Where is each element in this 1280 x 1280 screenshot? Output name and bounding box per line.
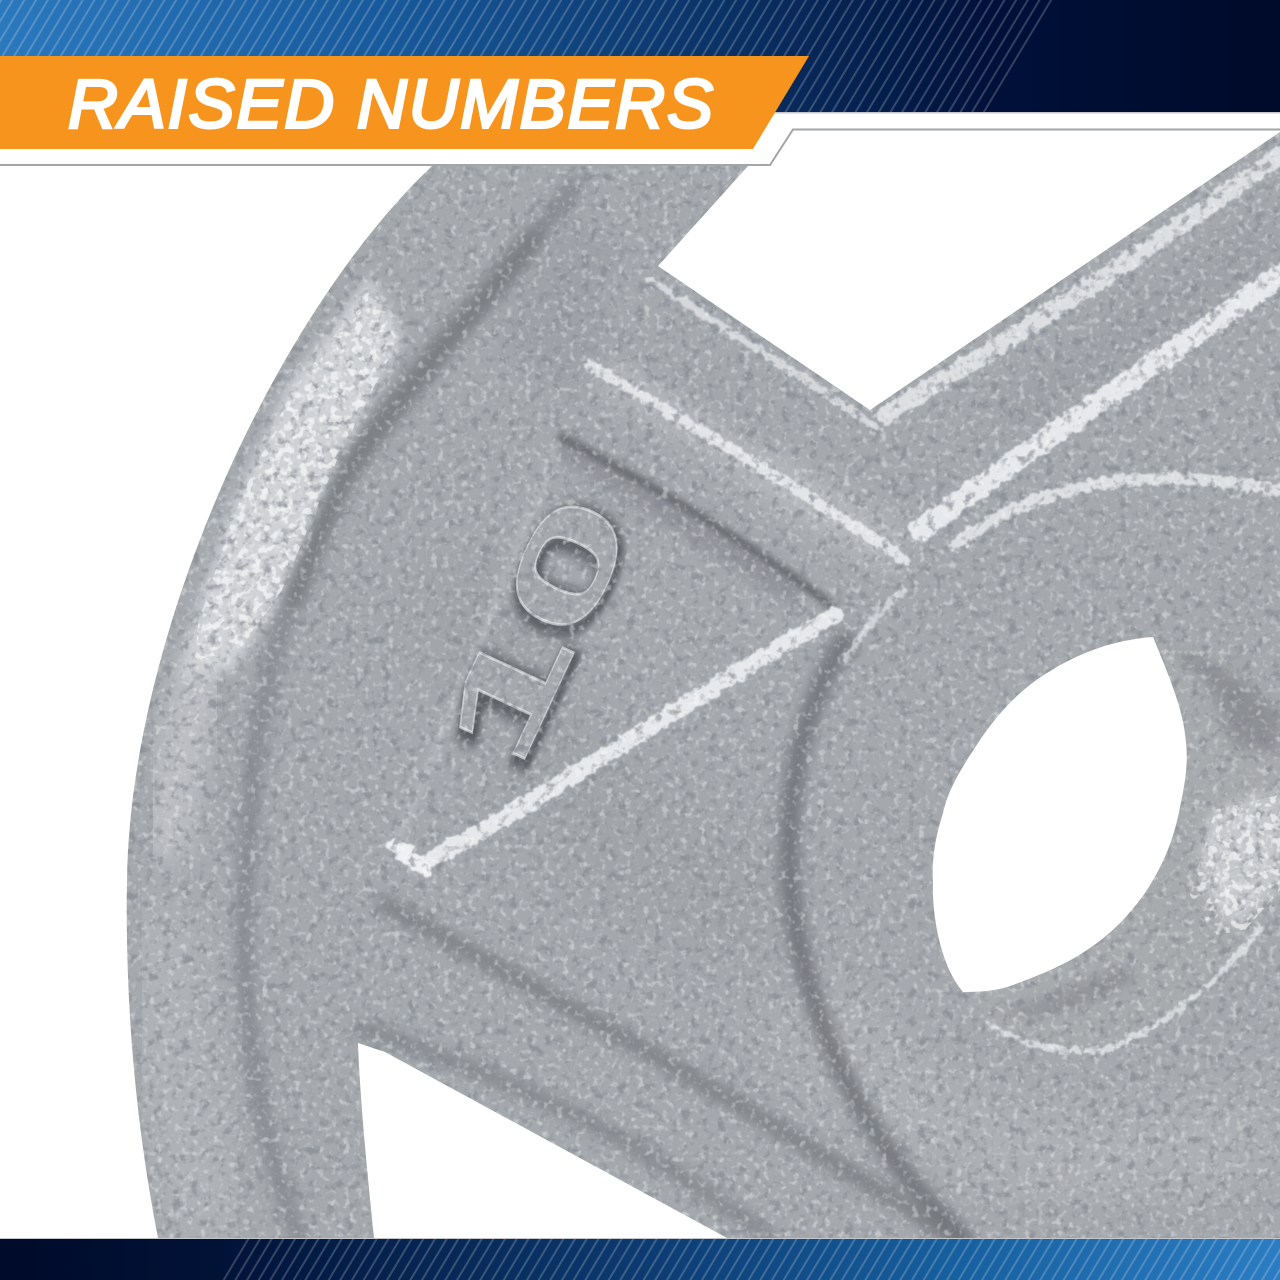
orange title banner (0, 56, 809, 149)
hole wall sparkle (1190, 796, 1280, 935)
photo: cast iron weight plate (100, 130, 1280, 1240)
bottom gradient band (0, 1238, 1280, 1280)
broad lighting on plate (142, 342, 1245, 1217)
rim sparkle (196, 291, 397, 659)
title: RAISED NUMBERS (68, 66, 713, 142)
hub hole inner wall (963, 637, 1280, 1054)
top gradient band (0, 0, 1280, 114)
shaded creases (245, 185, 965, 1240)
top band diagonal hatch (0, 0, 1060, 113)
white header panel with grey outline (0, 0, 1280, 165)
bottom band diagonal hatch (214, 1238, 1280, 1280)
plate base metal (100, 130, 1280, 1240)
number highlight: 10 (415, 473, 660, 784)
rim highlight (180, 275, 403, 680)
header outline (0, 130, 1280, 165)
bright ridges (395, 155, 1280, 870)
number shadow: 10 (417, 478, 662, 789)
raised number 10 (453, 498, 628, 778)
hub hole opening (933, 637, 1187, 992)
pebbled texture (100, 130, 1280, 1240)
